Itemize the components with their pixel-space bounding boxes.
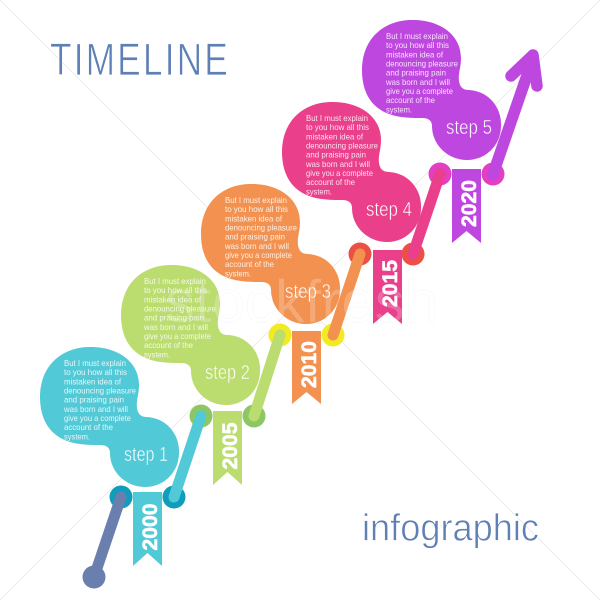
- ribbon: 2015: [373, 250, 402, 324]
- panel: step 2 bubble: was born and I will: [143, 323, 208, 332]
- panel: step 2 bubble: give you a complete: [144, 332, 211, 341]
- panel: step 4 bubble: mistaken idea of: [306, 132, 364, 141]
- panel: step 2 bubble: denouncing pleasure: [144, 304, 216, 314]
- panel: step 3 bubble: denouncing pleasure: [225, 224, 297, 232]
- ribbon: 2005: 2005: [219, 422, 242, 470]
- segment: step 3 to 4: [333, 254, 360, 335]
- panel: step 3 bubble: give you a complete: [225, 251, 292, 260]
- segment: step 2 to 3: [254, 335, 280, 416]
- panel: step 3 bubble: to you how all this: [225, 205, 288, 214]
- ribbon: 2010: 2010: [298, 341, 321, 388]
- panel: step 3 bubble: and praising pain: [225, 233, 285, 242]
- panel: step 5 bubble: denouncing pleasure: [386, 60, 458, 68]
- panel: step 1 bubble: account of the: [64, 423, 113, 432]
- panel: step 4 bubble: But I must explain: [306, 114, 368, 123]
- ribbon: 2000: 2000: [139, 504, 162, 550]
- ribbon: 2010: [292, 331, 321, 404]
- watermark: stockfresh: [165, 268, 438, 335]
- panel: step 5 bubble: give you a complete: [386, 87, 453, 96]
- panel: step 1 bubble: mistaken idea of: [64, 377, 122, 386]
- panel: step 4 bubble: give you a complete: [306, 169, 373, 178]
- panel: step 2 bubble: to you how all this: [144, 286, 207, 295]
- panel: step 1 bubble: and praising pain: [64, 396, 124, 405]
- panel: step 1 bubble: system.: [64, 432, 90, 441]
- timeline start segment: [82, 497, 121, 588]
- panel: step 5 bubble: mistaken idea of: [386, 50, 444, 59]
- panel: step 4 bubble: denouncing pleasure: [306, 142, 378, 150]
- panel: step 3 bubble: was born and I will: [224, 242, 289, 251]
- panel: step 5 bubble: was born and I will: [385, 78, 450, 87]
- panel: step 3 bubble: [201, 184, 340, 324]
- panel: step 2 bubble: [121, 265, 260, 405]
- panel: step 2 bubble: account of the: [144, 341, 193, 350]
- panel: step 2 bubble: But I must explain: [144, 277, 206, 286]
- panel: step 1 bubble: was born and I will: [63, 405, 128, 414]
- timeline node dots: [110, 162, 504, 508]
- ribbon: 2020: [452, 169, 481, 243]
- panel: step 1 bubble: give you a complete: [64, 414, 131, 423]
- panel: step 1 bubble: to you how all this: [64, 368, 127, 377]
- panel: step 1 bubble: [40, 347, 179, 487]
- panel: step 2 bubble: and praising pain: [144, 314, 204, 323]
- segment: step 4 to 5: [413, 174, 440, 254]
- panel: step 3 bubble: system.: [225, 269, 251, 278]
- panel: step 1 bubble: step 1: [124, 444, 168, 466]
- arrow: final segment pointing up: [493, 55, 537, 174]
- panel: step 4 bubble: and praising pain: [306, 151, 366, 160]
- panel: step 3 bubble: account of the: [225, 260, 274, 269]
- panel: step 4 bubble: account of the: [306, 178, 355, 187]
- panel: step 5 bubble: system.: [386, 105, 412, 114]
- ribbon: 2020: 2020: [458, 180, 481, 227]
- panel: step 3 bubble: But I must explain: [225, 196, 287, 205]
- title: TIMELINE: [50, 34, 228, 85]
- segment: step 1 to 2: [174, 416, 201, 497]
- panel: step 4 bubble: to you how all this: [306, 123, 369, 132]
- panel: step 2 bubble: mistaken idea of: [144, 295, 202, 304]
- ribbon: 2000: [133, 492, 162, 566]
- panel: step 4 bubble: was born and I will: [305, 160, 370, 169]
- subtitle: infographic: infographic: [362, 508, 539, 550]
- panel: step 5 bubble: step 5: [446, 117, 492, 139]
- ribbon: 2005: [213, 411, 242, 485]
- panel: step 2 bubble: step 2: [205, 362, 250, 384]
- panel: step 5 bubble: and praising pain: [386, 69, 446, 78]
- panel: step 5 bubble: account of the: [386, 96, 435, 105]
- panel: step 1 bubble: denouncing pleasure: [64, 386, 136, 396]
- panel: step 2 bubble: system.: [144, 350, 170, 359]
- ribbon: 2015: 2015: [379, 260, 402, 307]
- panel: step 3 bubble: mistaken idea of: [225, 214, 283, 223]
- panel: step 1 bubble: But I must explain: [64, 359, 126, 368]
- panel: step 5 bubble: But I must explain: [386, 32, 448, 41]
- panel: step 4 bubble: step 4: [366, 199, 412, 221]
- panel: step 3 bubble: step 3: [285, 281, 331, 303]
- panel: step 4 bubble: system.: [306, 187, 332, 196]
- panel: step 5 bubble: [362, 20, 501, 160]
- panel: step 4 bubble: [282, 102, 421, 242]
- panel: step 5 bubble: to you how all this: [386, 41, 449, 50]
